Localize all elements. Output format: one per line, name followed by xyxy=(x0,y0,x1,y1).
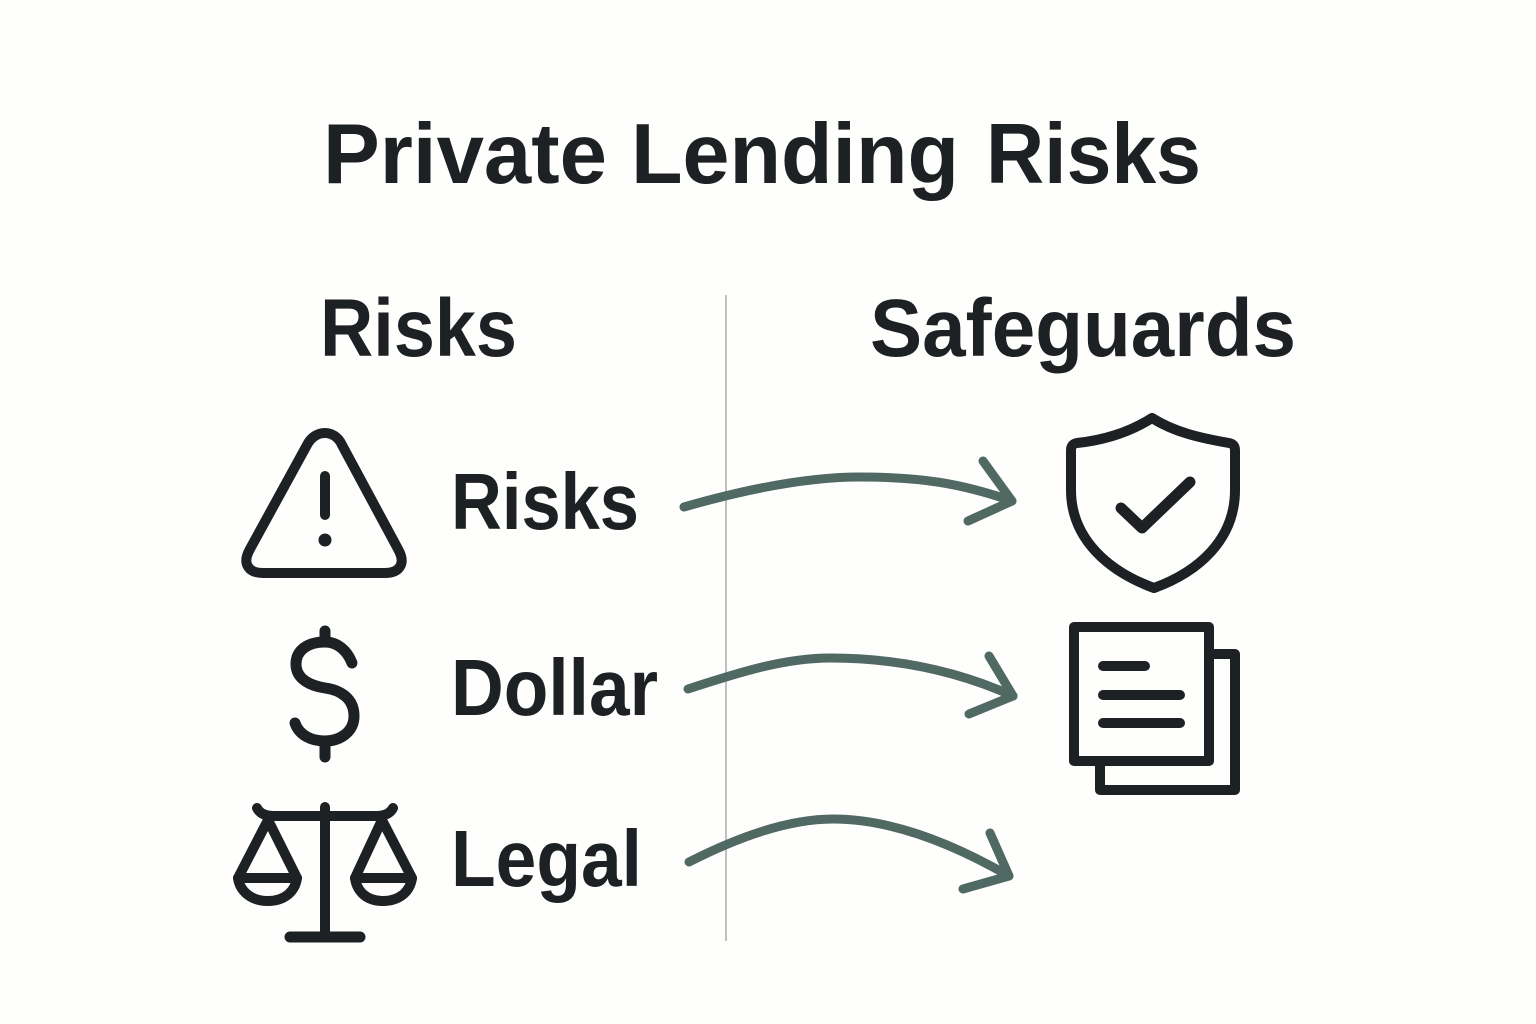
heading: safeguards column: Safeguards xyxy=(870,283,1296,374)
title: Risks xyxy=(986,107,1201,202)
label: risks: Risks xyxy=(451,457,639,546)
arrow: risks to shield xyxy=(684,461,1012,521)
icon: warning triangle xyxy=(246,433,402,573)
arrow: legal xyxy=(689,819,1009,889)
label: dollar: Dollar xyxy=(451,643,658,732)
icon: dollar sign xyxy=(295,631,354,757)
title: Lending xyxy=(631,107,959,202)
title: Private xyxy=(323,107,607,202)
icon: documents xyxy=(1074,627,1235,790)
arrow: dollar to document xyxy=(688,656,1013,714)
icon: shield with check xyxy=(1071,418,1235,588)
heading: risks column: Risks xyxy=(320,283,517,374)
label: legal: Legal xyxy=(451,814,642,903)
icon: scales of justice xyxy=(238,807,412,937)
